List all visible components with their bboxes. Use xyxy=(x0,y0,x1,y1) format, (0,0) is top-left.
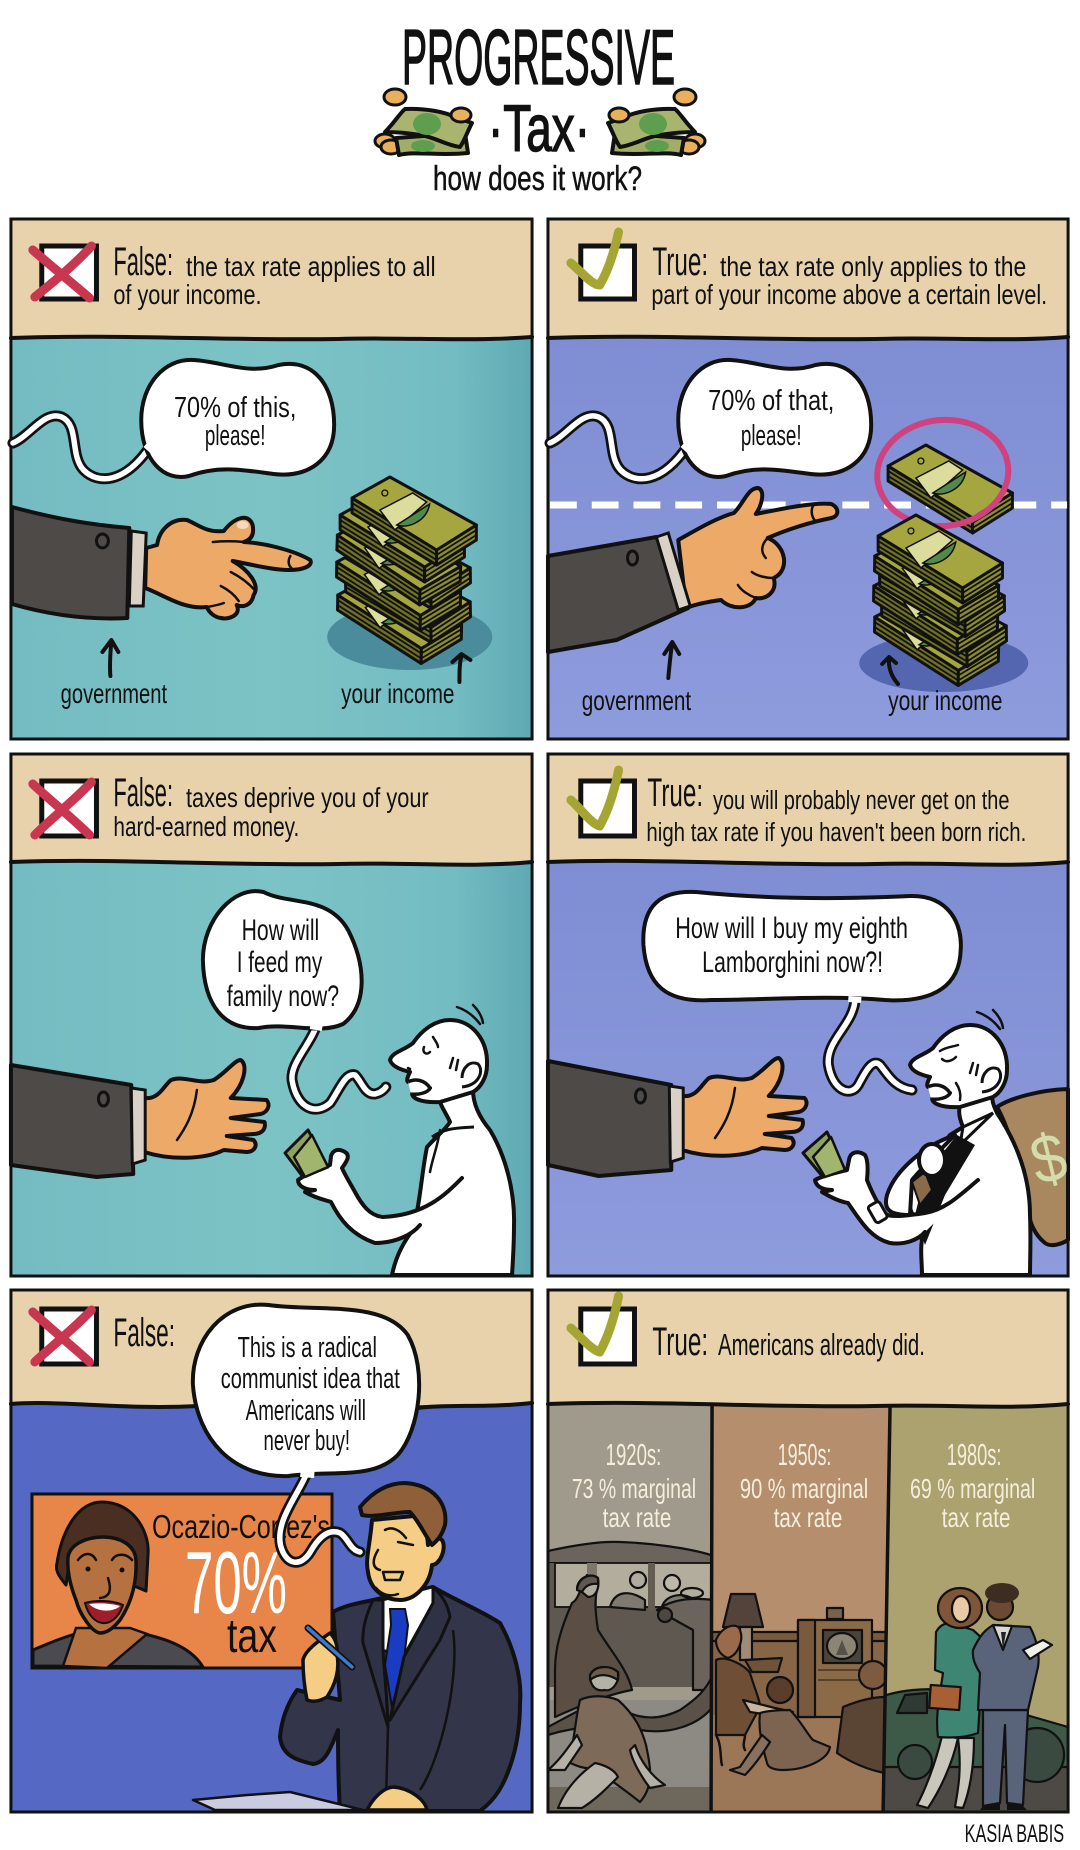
era column: 1920s: tax rate xyxy=(603,1502,671,1533)
text: true statement: Americans already did. xyxy=(718,1327,925,1362)
icon: money sack with dollar sign xyxy=(997,1089,1074,1245)
era column: 1980s: 1980s: xyxy=(947,1437,1001,1472)
speech bubble: how will I feed my family: How will xyxy=(242,914,319,947)
label: your income: your income xyxy=(888,685,1002,716)
icon: checked checkbox xyxy=(571,232,634,299)
icon: shadow and stack of money xyxy=(859,515,1028,692)
text: true statement: True: xyxy=(652,240,708,284)
text: false statement xyxy=(113,771,429,842)
icon: money and coins right xyxy=(608,89,705,155)
era column: 1920s xyxy=(548,1405,718,1812)
icon: checked checkbox xyxy=(571,1296,634,1364)
hand: pointing government arm xyxy=(548,488,837,652)
hand: open government hand xyxy=(548,1058,807,1176)
speech bubble: 70% of this: 70% of this, xyxy=(174,392,296,424)
speech bubble: 70% of this xyxy=(13,360,334,479)
speech bubble: how will I feed my family xyxy=(203,891,386,1109)
hand: open government hand xyxy=(11,1060,269,1177)
speech bubble: eighth Lamborghini: Lamborghini now?! xyxy=(702,946,883,979)
speech bubble: 70% of that xyxy=(550,360,871,479)
figure: rich man with money xyxy=(803,1010,1030,1275)
speech bubble: how will I feed my family: family now? xyxy=(227,980,339,1013)
portrait: smiling woman xyxy=(33,1502,203,1668)
icon: checked checkbox xyxy=(571,770,634,836)
text: false statement: hard-earned money. xyxy=(113,811,299,842)
icon: crossed checkbox xyxy=(33,1309,96,1364)
label: government: government xyxy=(582,685,691,716)
heading: tax: ·Tax· xyxy=(488,91,590,165)
TV screen: Ocazio-Cortez 70% tax xyxy=(32,1494,332,1668)
speech bubble: 70% of that: please! xyxy=(741,420,802,452)
TV screen: Ocazio-Cortez 70% tax: tax xyxy=(227,1610,277,1663)
text: true statement: True: xyxy=(652,1320,708,1364)
illustration: vintage car and flappers xyxy=(548,1542,718,1812)
icon: money and coins left xyxy=(375,89,472,155)
TV screen: Ocazio-Cortez 70% tax: Ocazio-Cortez's xyxy=(152,1508,330,1545)
dashed level line xyxy=(550,502,1067,508)
icon: shadow and stack of money xyxy=(327,477,492,670)
text: false label: False: xyxy=(113,1311,175,1355)
text: true statement xyxy=(646,771,1026,847)
speech bubble: 70% of this: please! xyxy=(205,420,266,452)
speech bubble: radical communist idea xyxy=(193,1305,419,1562)
text: false statement xyxy=(113,240,436,310)
illustration: couple by a green car xyxy=(880,1583,1070,1812)
text: false statement: False: xyxy=(113,771,173,815)
figure: news anchor xyxy=(193,1483,520,1811)
speech bubble: eighth Lamborghini: How will I buy my eighth xyxy=(675,912,908,945)
text: false statement: of your income. xyxy=(113,279,262,310)
speech bubble: radical communist idea: never buy! xyxy=(264,1425,350,1457)
icon: crossed checkbox xyxy=(33,246,96,299)
era column: 1920s: 1920s: xyxy=(606,1437,661,1472)
label: government: government xyxy=(61,678,167,709)
era column: 1920s: 73 % marginal xyxy=(572,1473,696,1504)
text: false statement: taxes deprive you of your xyxy=(186,782,429,813)
text: false statement: False: xyxy=(113,240,173,284)
text: true statement: True: xyxy=(647,771,703,815)
era column: 1950s: 90 % marginal xyxy=(740,1473,868,1504)
illustration: family watching television xyxy=(712,1594,890,1812)
arrow: your income xyxy=(882,657,898,684)
speech bubble: eighth Lamborghini xyxy=(643,892,961,1091)
subtitle: how does it work? xyxy=(433,160,642,198)
panel: false, radical communist idea xyxy=(11,1290,532,1812)
arrow: your income xyxy=(452,654,470,682)
arrow: government xyxy=(102,640,118,676)
figure: worried man with money xyxy=(285,1005,514,1275)
speech bubble: radical communist idea: This is a radical xyxy=(238,1332,377,1364)
label: your income: your income xyxy=(341,678,454,709)
panel: false, taxes deprive you xyxy=(11,754,532,1276)
title xyxy=(375,13,705,198)
era column: 1950s: 1950s: xyxy=(778,1437,831,1472)
era column: 1980s xyxy=(880,1405,1070,1812)
panel: true, Americans already did xyxy=(548,1290,1070,1812)
speech bubble: 70% of that: 70% of that, xyxy=(708,385,834,417)
speech bubble: how will I feed my family: I feed my xyxy=(237,946,322,979)
TV screen: Ocazio-Cortez 70% tax: 70% xyxy=(185,1533,287,1632)
panel: true, rate applies above a certain level xyxy=(548,219,1068,739)
panel: true, you will probably never get on the high rate xyxy=(548,754,1074,1276)
arrow: government xyxy=(664,642,679,678)
text: true statement xyxy=(651,240,1047,310)
panel: false, tax rate applies to all income xyxy=(11,219,532,739)
era column: 1950s xyxy=(711,1405,890,1812)
hand: pointing government arm xyxy=(12,507,311,618)
era column: 1980s: tax rate xyxy=(942,1502,1010,1533)
icon: crossed checkbox xyxy=(33,781,96,836)
text: false statement: the tax rate applies to all xyxy=(186,251,436,282)
title: PROGRESSIVE xyxy=(402,13,675,101)
icon: top bundle of money xyxy=(888,445,1012,533)
icon: money sack with dollar sign: $ xyxy=(1023,1118,1074,1200)
speech bubble: radical communist idea: communist idea that xyxy=(221,1363,400,1395)
icon: pink circle xyxy=(872,413,1014,533)
text: true statement xyxy=(652,1320,925,1364)
speech bubble: radical communist idea: Americans will xyxy=(246,1395,366,1427)
era column: 1950s: tax rate xyxy=(774,1502,842,1533)
